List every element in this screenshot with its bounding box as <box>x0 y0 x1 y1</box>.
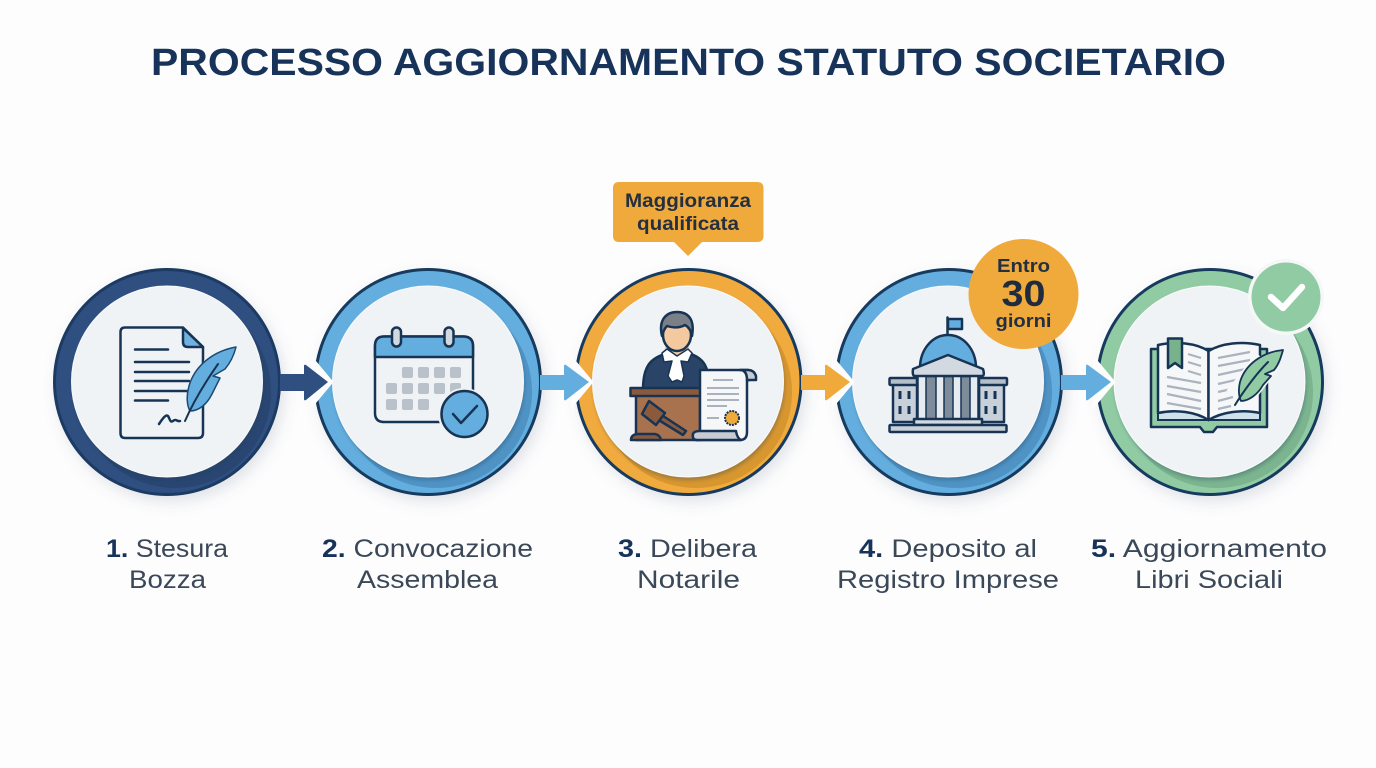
label: step 2 line 2: Assemblea <box>357 566 498 594</box>
label: step 3: 3. Delibera <box>618 535 757 563</box>
arrow 2 to 3 <box>540 355 594 409</box>
badge: entro 30 giorni: Entro <box>997 256 1050 276</box>
arrow 4 to 5 <box>1061 355 1116 409</box>
label: step 5 line 2: Libri Sociali <box>1135 566 1283 594</box>
badge: entro 30 giorni: giorni <box>996 311 1052 331</box>
step 2 circle <box>316 270 540 494</box>
label: step 4: 4. Deposito al <box>859 535 1037 563</box>
step 4 circle <box>836 270 1062 494</box>
label: step 3 line 2: Notarile <box>637 566 740 594</box>
badge: entro 30 giorni <box>968 239 1078 349</box>
callout: maggioranza qualificata <box>613 182 764 256</box>
label: step 2: 2. Convocazione <box>322 535 533 563</box>
badge: completed check <box>1248 259 1324 335</box>
label: step 4 line 2: Registro Imprese <box>837 566 1059 594</box>
arrow 1 to 2 <box>280 355 334 409</box>
step 5 circle <box>1098 270 1322 494</box>
icon: open book with quill <box>1151 338 1283 432</box>
arrow 3 to 4 <box>801 355 854 409</box>
icon: calendar with check <box>375 328 490 440</box>
step 1 circle <box>54 270 280 494</box>
icon: government building <box>890 318 1007 432</box>
label: step 5: 5. Aggiornamento <box>1091 535 1327 563</box>
icon: notary with gavel and scroll <box>630 312 756 440</box>
label: step 1 line 2: Bozza <box>129 566 206 594</box>
title: PROCESSO AGGIORNAMENTO STATUTO SOCIETARIO <box>151 42 1226 84</box>
badge: entro 30 giorni: 30 <box>1002 273 1046 314</box>
callout: maggioranza qualificata: Maggioranza <box>625 191 751 212</box>
callout: maggioranza qualificata: qualificata <box>637 214 739 235</box>
icon: document with quill <box>120 328 236 438</box>
step 3 circle <box>576 270 801 494</box>
label: step 1: 1. Stesura <box>106 535 228 563</box>
